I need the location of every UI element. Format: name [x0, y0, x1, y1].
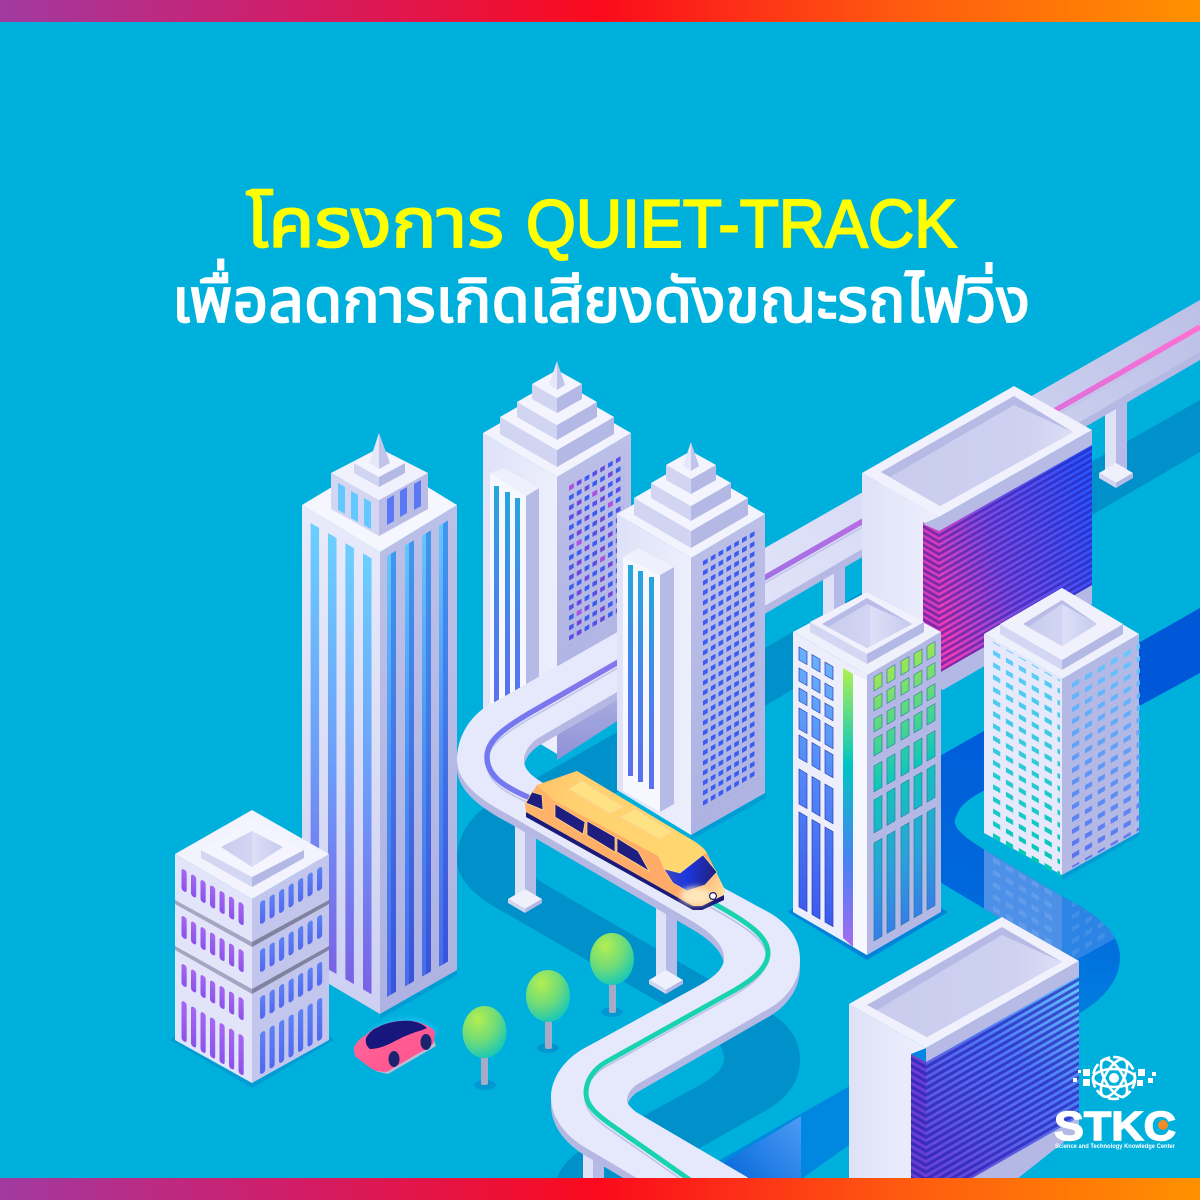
front building with striped facade — [849, 917, 1079, 1190]
atom icon — [1093, 1055, 1135, 1101]
STKC logo: STKC — [1054, 1103, 1176, 1149]
building ground shadows — [170, 793, 1139, 1088]
title line 1: QUIET-TRACK — [526, 186, 957, 262]
title line 1 — [246, 185, 957, 262]
title line 1: โครงการ — [246, 185, 504, 262]
low purple-windowed building — [175, 810, 329, 1083]
STKC logo — [1054, 1055, 1176, 1150]
top gradient bar — [0, 0, 1200, 22]
tower 2 (back centre) — [483, 361, 631, 760]
train windows — [526, 792, 649, 871]
large rear building with striped facade — [862, 386, 1092, 690]
bottom gradient bar — [0, 1178, 1200, 1200]
train — [525, 771, 725, 910]
tower 1 (tall left) — [302, 433, 457, 1014]
STKC logo: Science and Technology Knowledge Center — [1055, 1143, 1175, 1150]
tower 1 penthouse — [331, 433, 428, 536]
elevated rail deck — [457, 300, 1200, 1198]
floor separators — [175, 900, 329, 994]
title line 2: เพื่อลดการเกิดเสียงดังขณะรถไฟวิ่ง — [172, 259, 1030, 336]
pillars under the elevated rail — [508, 400, 1133, 1180]
green-windowed building — [793, 592, 941, 955]
car — [354, 1018, 438, 1074]
tower 3 (front centre) — [617, 442, 765, 835]
train windshield — [664, 855, 717, 891]
trees — [462, 933, 634, 1090]
rail stripe: green — [585, 861, 768, 1195]
reflection of front building in river — [722, 1116, 801, 1178]
river — [700, 608, 1200, 1180]
rail stripe: pink to violet — [487, 327, 1200, 866]
cyan-windowed building — [984, 588, 1140, 880]
reflection of cyan building in river — [984, 850, 1115, 960]
rail ground shadow — [457, 400, 1200, 1180]
